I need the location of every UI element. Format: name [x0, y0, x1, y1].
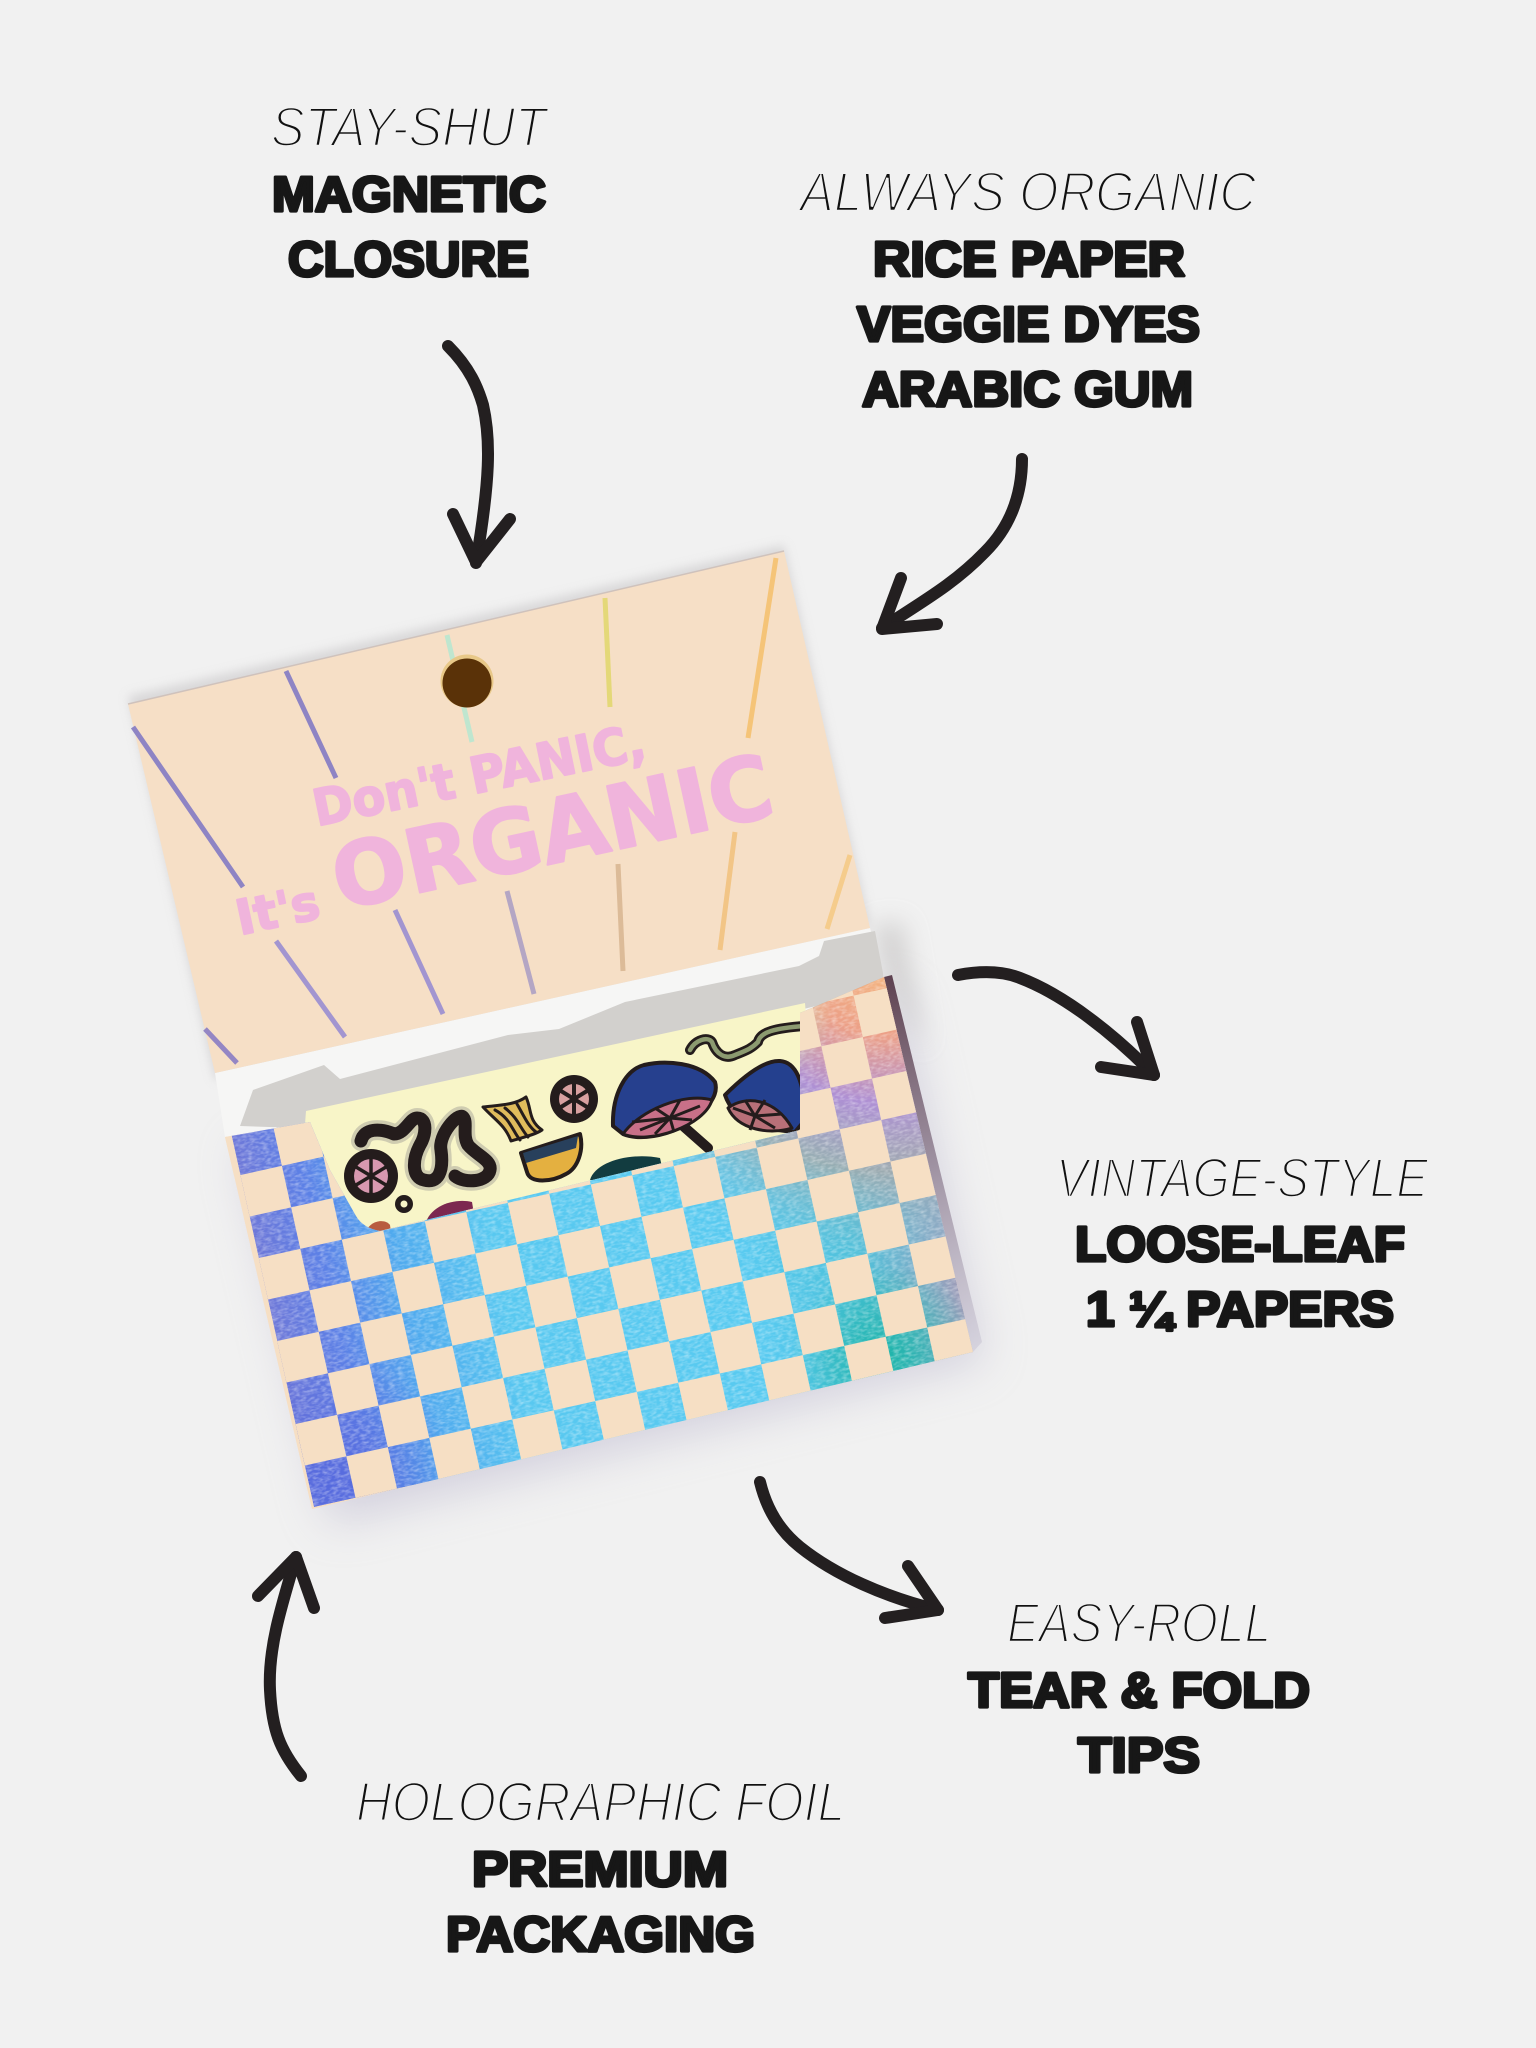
doodle: lower fragments [365, 1156, 665, 1240]
caption: premium packaging: PACKAGING [446, 1908, 755, 1962]
holographic checkered pocket [225, 977, 973, 1509]
doodle: pinwheel left [344, 1149, 398, 1203]
caption: organic materials: ARABIC GUM [862, 363, 1193, 417]
caption: organic materials: RICE PAPER [873, 233, 1185, 287]
flap foil rays [133, 558, 850, 1063]
flap slogan: ORGANIC [323, 734, 782, 931]
caption: premium packaging [356, 1770, 845, 1962]
product: rolling papers pack [128, 545, 1020, 1550]
inner tray: white strip and grey fold [215, 928, 884, 1140]
flap [128, 551, 870, 1073]
doodle: green squiggle [690, 1026, 805, 1057]
caption: magnetic closure: MAGNETIC [272, 168, 546, 222]
caption: tear and fold tips [968, 1591, 1310, 1783]
caption: organic materials [797, 160, 1256, 417]
caption: loose-leaf papers: 1 ¼ PAPERS [1086, 1283, 1394, 1337]
caption: organic materials: VEGGIE DYES [857, 298, 1200, 352]
doodle: second blue mushroom [725, 1061, 805, 1132]
doodle: noodle bowl [483, 1097, 581, 1180]
flap slogan: Don't PANIC, [308, 713, 651, 838]
caption: premium packaging: PREMIUM [472, 1843, 728, 1897]
infographic [128, 108, 1428, 1954]
doodle: pinwheel centre [550, 1075, 598, 1123]
caption: tear and fold tips: TIPS [1078, 1729, 1200, 1783]
arrow: to tear and fold tips [760, 1482, 938, 1618]
arrow: to loose-leaf papers [958, 972, 1154, 1075]
rolling paper with illustrations [300, 1003, 825, 1265]
caption: loose-leaf papers: LOOSE-LEAF [1075, 1218, 1405, 1272]
magnet hole [440, 654, 494, 708]
caption: loose-leaf papers: VINTAGE-STYLE [1056, 1146, 1429, 1209]
flap slogan: It's [231, 874, 325, 947]
flap slogan [231, 713, 782, 947]
caption: magnetic closure: STAY-SHUT [271, 95, 549, 158]
arrow: to rice paper [882, 459, 1022, 629]
caption: tear and fold tips: EASY-ROLL [1007, 1591, 1271, 1654]
caption: magnetic closure: CLOSURE [288, 233, 529, 287]
caption: organic materials: ALWAYS ORGANIC [797, 160, 1256, 223]
caption: loose-leaf papers [1056, 1146, 1429, 1337]
doodle: black squiggle [361, 1116, 490, 1181]
arrow: to magnetic closure [448, 346, 510, 563]
caption: premium packaging: HOLOGRAPHIC FOIL [356, 1770, 845, 1833]
caption: tear and fold tips: TEAR & FOLD [968, 1664, 1310, 1718]
doodle: large blue mushroom [613, 1063, 716, 1148]
arrow: to holographic foil [258, 1557, 314, 1776]
caption: magnetic closure [271, 95, 549, 287]
